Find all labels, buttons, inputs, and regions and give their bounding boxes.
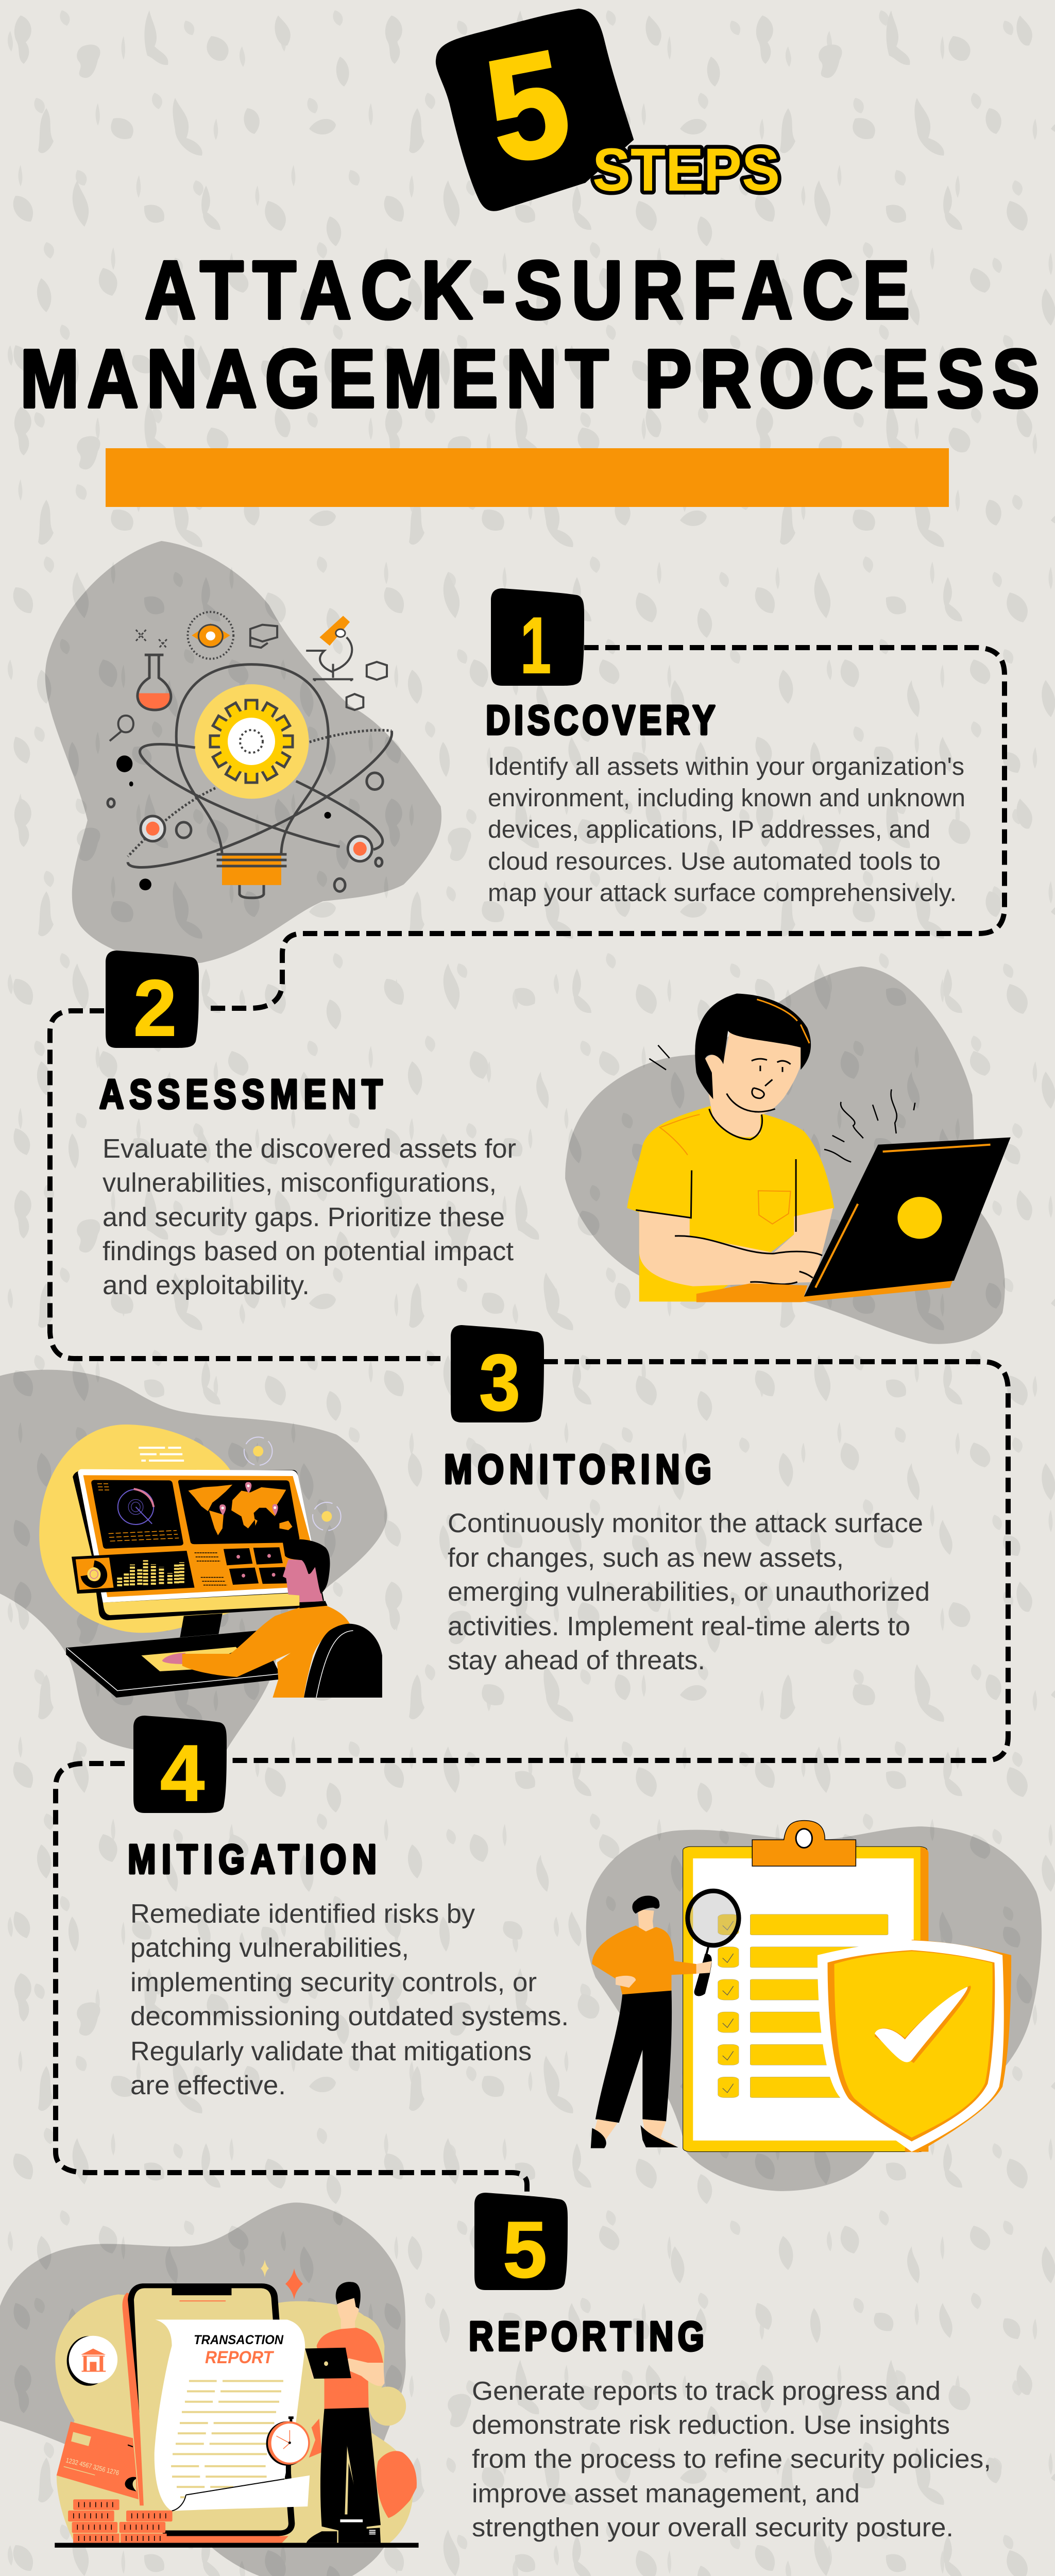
report text — [194, 2333, 284, 2367]
panel: discovery — [45, 541, 1005, 1008]
radar panel — [91, 1480, 183, 1549]
text: reporting description: strengthen your overall security posture. — [472, 2513, 954, 2542]
checklist rows — [718, 1914, 888, 2098]
report paper — [155, 2319, 310, 2511]
panel: assessment — [50, 951, 1011, 1359]
report text: TRANSACTION — [194, 2333, 284, 2347]
text: discovery description: cloud resources. Use automated tools to — [488, 848, 941, 875]
eye — [188, 612, 233, 659]
text: assessment description: Evaluate the discovered assets for — [103, 1134, 516, 1164]
chart panel — [72, 1551, 227, 1594]
step 3 badge — [451, 1325, 544, 1427]
title: ATTACK-SURFACE — [145, 244, 910, 336]
text: discovery description: environment, including known and unknown — [488, 785, 965, 812]
panel: monitoring — [0, 1325, 1008, 1760]
heading: discovery: DISCOVERY — [486, 697, 715, 743]
text: monitoring description: stay ahead of threats. — [448, 1646, 705, 1675]
face — [703, 1031, 802, 1137]
person at desk — [162, 1539, 382, 1698]
blob and light bulb illustration — [45, 541, 441, 964]
arms — [639, 1208, 833, 1286]
step 4 badge — [133, 1716, 227, 1818]
text: monitoring description: activities. Implement real-time alerts to — [448, 1612, 910, 1641]
text: assessment description: vulnerabilities, misconfigurations, — [103, 1168, 497, 1198]
text: discovery description: Identify all assets within your organization's — [488, 753, 964, 781]
magnifying glass — [688, 1891, 739, 1996]
blob and person with laptop illustration — [565, 967, 1011, 1344]
molecule marks — [136, 630, 167, 648]
text: mitigation description: implementing security controls, or — [130, 1968, 537, 1997]
sparkles — [261, 2260, 303, 2299]
step 1 badge — [491, 588, 584, 690]
shield — [818, 1940, 1011, 2153]
orange title bar — [106, 448, 949, 507]
text: reporting description — [472, 2376, 991, 2542]
hair — [695, 993, 811, 1099]
text: discovery description: devices, applications, IP addresses, and — [488, 816, 930, 843]
text: assessment description: findings based on potential impact — [103, 1236, 514, 1266]
text: assessment description — [103, 1134, 516, 1300]
step 5 badge — [474, 2193, 568, 2294]
text: discovery description — [488, 753, 965, 907]
heading: monitoring: MONITORING — [444, 1446, 711, 1492]
monitor stand and desk — [66, 1614, 279, 1698]
small video panels — [224, 1547, 287, 1585]
text: mitigation description: patching vulnerabilities, — [130, 1933, 409, 1963]
bank emblem — [67, 2336, 117, 2386]
shirt — [627, 1106, 835, 1301]
text: reporting description: demonstrate risk reduction. Use insights — [472, 2410, 950, 2439]
face details — [636, 1059, 822, 1284]
step 2 badge: 2 — [133, 963, 177, 1053]
dashed connector from step 4 to step 5 — [56, 1764, 527, 2194]
text: assessment description: and security gaps. Prioritize these — [103, 1202, 505, 1232]
card number: 1232 4567 3256 1276 — [65, 2456, 120, 2477]
bulb socket — [217, 853, 286, 898]
text: assessment description: and exploitability. — [103, 1270, 310, 1300]
text: reporting description: from the process to refine security policies, — [472, 2444, 991, 2473]
microscope — [306, 616, 353, 681]
phone — [123, 2283, 295, 2543]
panel: reporting — [0, 2193, 991, 2576]
world map panel — [178, 1480, 299, 1544]
text: monitoring description: emerging vulnerabilities, or unauthorized — [448, 1577, 930, 1607]
leaf — [309, 2419, 417, 2518]
yellow backdrop — [39, 1425, 230, 1633]
heading: assessment: ASSESSMENT — [99, 1071, 382, 1117]
title — [20, 244, 1040, 425]
stopwatch — [266, 2418, 310, 2478]
dashed connector from step 1 to step 2 — [205, 648, 1005, 1008]
badge tile — [436, 9, 634, 211]
step 1 badge: 1 — [520, 601, 551, 690]
shirt pocket — [758, 1191, 791, 1224]
man with tablet — [305, 2282, 384, 2543]
laptop — [696, 1280, 952, 1302]
gear — [210, 700, 293, 783]
text: reporting description: Generate reports to track progress and — [472, 2376, 941, 2405]
step 4 badge: 4 — [160, 1728, 205, 1818]
panel: mitigation — [56, 1716, 1042, 2194]
large number 5: 5 — [474, 19, 582, 195]
header: 5 steps badge — [436, 9, 780, 211]
step 5 badge: 5 — [503, 2205, 547, 2294]
text: mitigation description: are effective. — [130, 2071, 286, 2100]
ground line — [55, 2543, 419, 2548]
dashed connector from step 3 to step 4 — [227, 1362, 1008, 1760]
title: MANAGEMENT PROCESS — [20, 332, 1040, 425]
coin stacks — [68, 2499, 173, 2543]
white notes and orbits — [139, 1437, 341, 1531]
blob behind report — [0, 2202, 406, 2576]
monitor — [73, 1469, 324, 1620]
report illustration — [55, 2282, 419, 2548]
step 2 badge — [106, 951, 199, 1053]
person — [591, 1895, 712, 2148]
clipboard and person illustration — [586, 1821, 1042, 2191]
text: monitoring description — [448, 1509, 930, 1675]
blob — [586, 1826, 1042, 2191]
motion marks — [649, 1045, 915, 1162]
text: reporting description: improve asset management, and — [472, 2479, 860, 2508]
heading: reporting: REPORTING — [469, 2313, 704, 2359]
magnifier — [110, 716, 133, 741]
STEPS word: STEPS — [592, 136, 780, 204]
heading: mitigation: MITIGATION — [128, 1836, 377, 1882]
text: discovery description: map your attack surface comprehensively. — [488, 879, 957, 907]
credit card — [57, 2421, 139, 2499]
text: mitigation description — [130, 1899, 569, 2100]
text: mitigation description: Remediate identified risks by — [130, 1899, 475, 1929]
clipboard — [683, 1821, 928, 2152]
text: mitigation description: decommissioning outdated systems. — [130, 2002, 569, 2031]
hexagons — [250, 625, 387, 710]
flask — [137, 655, 171, 710]
report text: REPORT — [205, 2348, 275, 2367]
text: monitoring description: for changes, such as new assets, — [448, 1543, 844, 1573]
step 3 badge: 3 — [479, 1338, 520, 1427]
dashed connector from step 2 to step 3 — [50, 1011, 440, 1359]
text: mitigation description: Regularly validate that mitigations — [130, 2037, 532, 2066]
text: monitoring description: Continuously monitor the attack surface — [448, 1509, 923, 1538]
tan backdrop — [55, 2294, 413, 2543]
monitor and person illustration — [39, 1425, 382, 1698]
blob behind monitor — [0, 1370, 387, 1758]
